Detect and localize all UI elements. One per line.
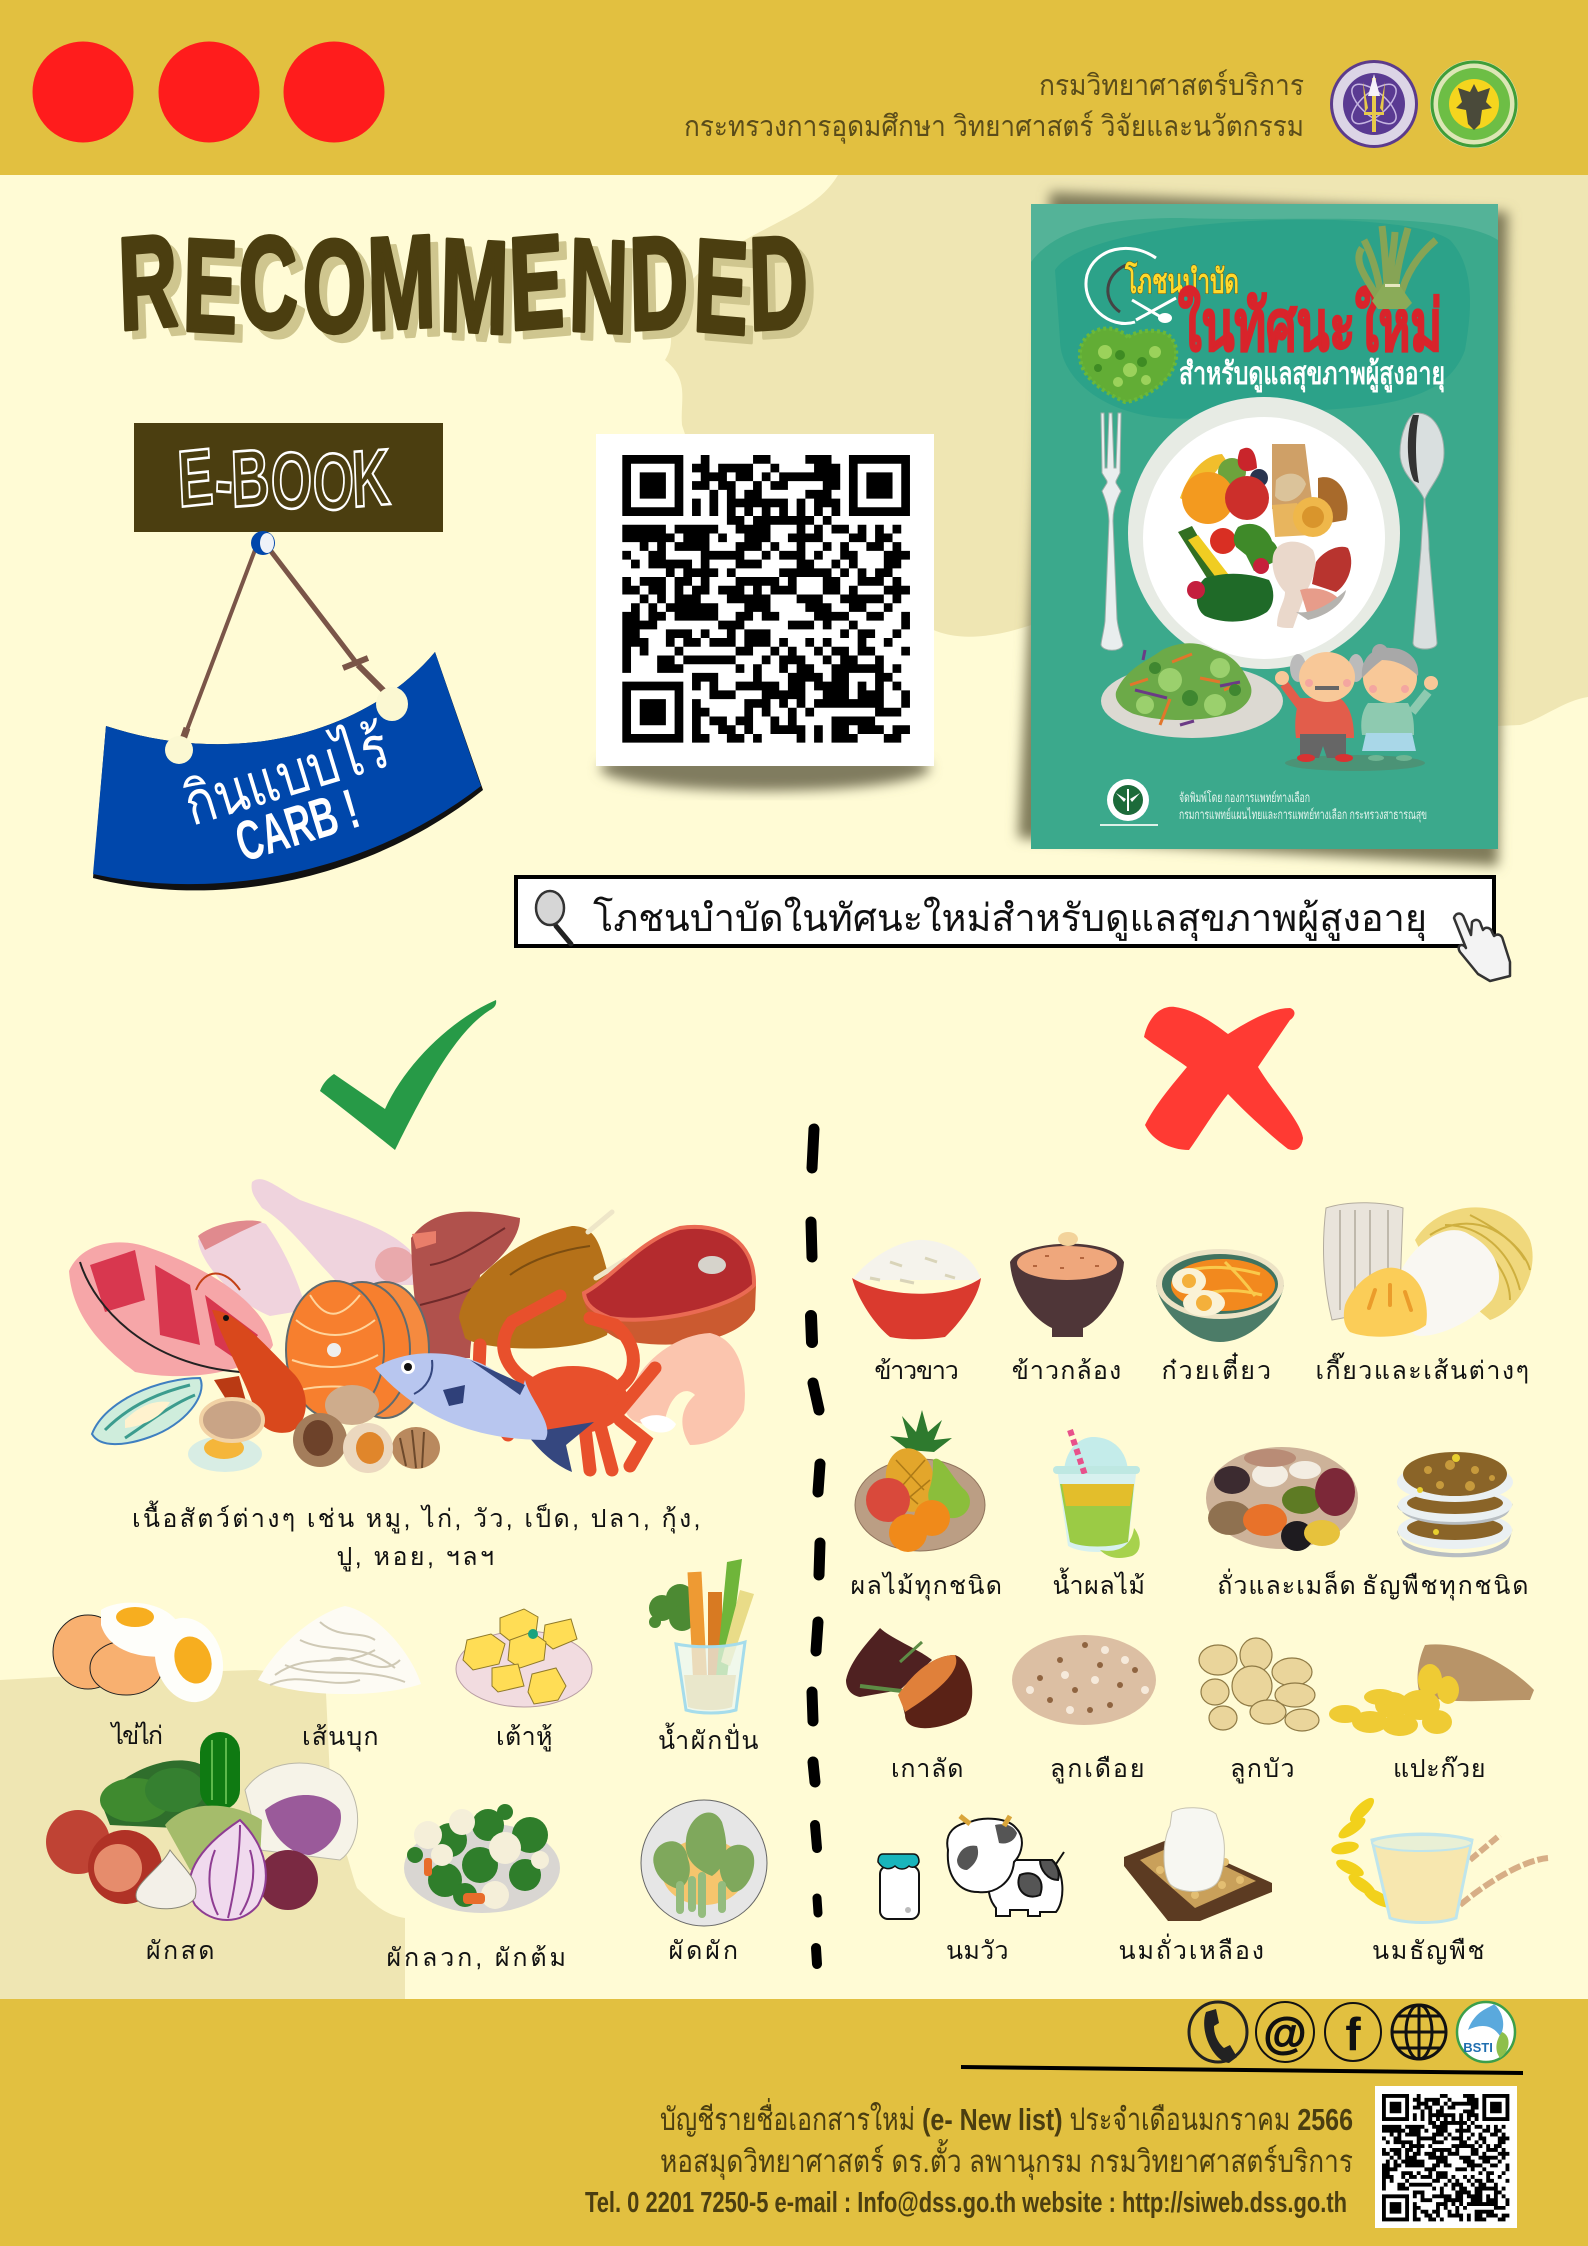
- elderly woman: [1361, 644, 1438, 761]
- illustration: cow: [947, 1816, 1064, 1916]
- steak: [584, 1227, 756, 1345]
- search bar: [516, 877, 1510, 981]
- hanging sign: CARB !: [228, 777, 366, 873]
- illustration: grain plates: [1397, 1452, 1513, 1557]
- logo: science service purple: [1330, 60, 1418, 148]
- cover publisher text: [1179, 790, 1427, 823]
- icon: globe: [1392, 2005, 1446, 2059]
- icon: at sign: [1256, 2002, 1314, 2062]
- label: wontons and noodles: เกี๊ยวและเส้นต่างๆ: [1316, 1352, 1530, 1385]
- book cover: ในทัศนะใหม่: [1178, 285, 1442, 365]
- label: stir fried vegetables: ผัดผัก: [668, 1937, 740, 1965]
- icon: facebook: f: [1345, 2008, 1361, 2060]
- cover logo ring: [1086, 248, 1176, 324]
- footer text: [585, 2098, 1353, 2219]
- label: meats: [132, 1500, 702, 1572]
- fruit quarter: [1180, 448, 1269, 524]
- illustration: white rice: [852, 1240, 981, 1339]
- label: meats: ปู, หอย, ฯลฯ: [336, 1543, 496, 1572]
- label: fresh vegetables: ผักสด: [146, 1937, 216, 1965]
- footer text: Tel. 0 2201 7250-5 e-mail : Info@dss.go.th website : http://siweb.dss.go.th: [585, 2187, 1347, 2219]
- search text: โภชนบำบัดในทัศนะใหม่สำหรับดูแลสุขภาพผู้สูงอายุ: [593, 896, 1427, 941]
- label: blanched vegetables: ผักลวก, ผักต้ม: [386, 1944, 568, 1972]
- illustration: lotus seeds: [1199, 1638, 1319, 1731]
- title: RECOMMENDED: RECOMMENDED: [122, 216, 821, 369]
- cover ministry logo: [1100, 779, 1158, 826]
- icon: at sign: @: [1264, 2009, 1306, 2058]
- pin: [251, 531, 275, 555]
- icon: cross mark: [1144, 1007, 1303, 1150]
- beige background patch: bottom left: [0, 1670, 405, 1999]
- icon: pointer hand: [1454, 914, 1510, 981]
- beige background patch: top right: [665, 175, 1588, 730]
- grain quarter: [1272, 444, 1348, 537]
- illustration: noodle soup: [1156, 1249, 1284, 1342]
- elderly man: [1275, 652, 1364, 762]
- illustration: chestnuts: [846, 1628, 972, 1728]
- label: gingko: แปะก๊วย: [1393, 1755, 1487, 1783]
- illustration: soy milk: [1124, 1808, 1272, 1921]
- illustration: job's tears: [1012, 1635, 1156, 1725]
- QR card: [596, 434, 934, 791]
- pork: [69, 1242, 273, 1376]
- illustration: fresh vegetables: [46, 1732, 358, 1920]
- icon: phone: [1189, 2002, 1247, 2063]
- cover blob: [1055, 220, 1470, 419]
- prawn: [196, 1274, 306, 1433]
- book cover: [1018, 192, 1508, 866]
- icon: facebook: [1325, 2003, 1381, 2061]
- cover publisher text: จัดพิมพ์โดย กองการแพทย์ทางเลือก: [1179, 790, 1310, 805]
- footer band: [0, 1999, 1588, 2246]
- label: chestnuts: เกาลัด: [891, 1755, 965, 1783]
- illustration: gingko: [1329, 1644, 1534, 1736]
- fish: [375, 1353, 594, 1472]
- label box: E-BOOK: E-BOOK: [174, 433, 392, 527]
- lettuce heart: [1080, 328, 1176, 402]
- organisation text: กรมวิทยาศาสตร์บริการ: [1039, 69, 1304, 102]
- board text: กินแบบไร้: [176, 712, 397, 838]
- icon: magnifier: [536, 891, 571, 944]
- organisation text: กระทรวงการอุดมศึกษา วิทยาศาสตร์ วิจัยและนวัตกรรม: [684, 110, 1304, 144]
- divider line: [961, 2065, 1523, 2075]
- label: tofu: เต้าหู้: [496, 1723, 554, 1752]
- illustration: fruit juice: [1053, 1430, 1140, 1558]
- illustration: blanched vegetables: [404, 1804, 560, 1913]
- label: fruit juice: น้ำผลไม้: [1052, 1567, 1146, 1600]
- label: brown rice: ข้าวกล้อง: [1012, 1357, 1123, 1385]
- organisation text: [684, 69, 1304, 144]
- label: white rice: ข้าวขาว: [874, 1357, 960, 1385]
- cockles: [293, 1385, 440, 1473]
- illustration: stir fried vegetables: [641, 1800, 767, 1926]
- header band: [0, 0, 1588, 175]
- salmon: [286, 1281, 429, 1419]
- label: job's tears: ลูกเดือย: [1050, 1755, 1146, 1784]
- ground shadow: [1285, 755, 1425, 771]
- illustration: wontons and noodles: [1324, 1203, 1533, 1337]
- label: konjac noodles: เส้นบุก: [302, 1723, 380, 1752]
- footer text: บัญชีรายชื่อเอกสารใหม่ (e- New list) ประจำเดือนมกราคม 2566: [660, 2098, 1353, 2137]
- label: vegetable smoothie: น้ำผักปั่น: [658, 1722, 760, 1755]
- asparagus: [1359, 226, 1436, 309]
- illustration: beans: [1206, 1447, 1358, 1551]
- red circle 2: [158, 42, 260, 142]
- label: meats: เนื้อสัตว์ต่างๆ เช่น หมู, ไก่, วัว, เป็ด, ปลา, กุ้ง,: [132, 1500, 702, 1534]
- mussel: [92, 1378, 202, 1444]
- label: eggs: ไข่ไก่: [110, 1721, 164, 1750]
- illustration: milk jar: [878, 1854, 919, 1919]
- label: beans and seeds: ถั่วและเมล็ด: [1217, 1568, 1357, 1600]
- liver: [411, 1212, 520, 1358]
- vegetable quarter: [1178, 524, 1278, 622]
- fork: [1101, 413, 1123, 650]
- illustration: konjac noodles: [258, 1606, 421, 1694]
- book cover: สำหรับดูแลสุขภาพผู้สูงอายุ: [1179, 356, 1445, 393]
- illustration: brown rice: [1010, 1232, 1124, 1337]
- logo: DSS BSTI: [1457, 2002, 1515, 2062]
- red circle 1: [32, 42, 134, 142]
- title: RECOMMENDED: RECOMMENDED: [114, 208, 813, 361]
- roast chicken: [459, 1212, 625, 1349]
- footer text: หอสมุดวิทยาศาสตร์ ดร.ตั้ว ลพานุกรม กรมวิทยาศาสตร์บริการ: [660, 2139, 1353, 2181]
- cover title: โภชนบำบัด: [1124, 261, 1239, 301]
- spoon: [1400, 413, 1444, 649]
- label: grain milk: นมธัญพืช: [1372, 1937, 1486, 1965]
- illustration: tofu plate: [456, 1609, 592, 1707]
- label: all grains: ธัญพืชทุกชนิด: [1362, 1572, 1530, 1601]
- illustration: vegetable smoothie: [649, 1559, 754, 1713]
- icon: check mark: [320, 1000, 496, 1150]
- crab: [478, 1296, 655, 1470]
- illustration: meat and seafood: [69, 1179, 756, 1473]
- cover publisher text: กรมการแพทย์แผนไทยและการแพทย์ทางเลือก กระทรวงสาธารณสุข: [1179, 807, 1427, 823]
- clam: [188, 1399, 263, 1472]
- footer QR code: [1375, 2086, 1517, 2228]
- label: noodle soup: ก๋วยเตี๋ยว: [1162, 1352, 1272, 1385]
- label: soy milk: นมถั่วเหลือง: [1118, 1933, 1266, 1965]
- salad plate: [1101, 643, 1283, 738]
- meat quarter: [1272, 542, 1351, 628]
- illustration: grain milk: [1330, 1794, 1548, 1922]
- label: fruits: ผลไม้ทุกชนิด: [850, 1571, 1004, 1601]
- main plate: [1128, 397, 1400, 669]
- logo: DSS BSTI: BSTI: [1463, 2040, 1493, 2055]
- dashed divider: [811, 1129, 820, 1964]
- chicken piece: [198, 1222, 306, 1316]
- hanging sign: [93, 531, 483, 890]
- drumstick: [252, 1179, 414, 1285]
- ropes: [180, 550, 388, 748]
- logo: green garuda: [1430, 60, 1518, 148]
- illustration: fruits: [855, 1410, 985, 1552]
- label: lotus seeds: ลูกบัว: [1230, 1755, 1296, 1784]
- label box: E-BOOK: [134, 423, 443, 532]
- label: cow milk: นมวัว: [946, 1937, 1010, 1965]
- blue board: [93, 652, 483, 890]
- red circle 3: [284, 42, 384, 142]
- illustration: eggs: [53, 1603, 234, 1711]
- cooked shrimp: [625, 1333, 745, 1445]
